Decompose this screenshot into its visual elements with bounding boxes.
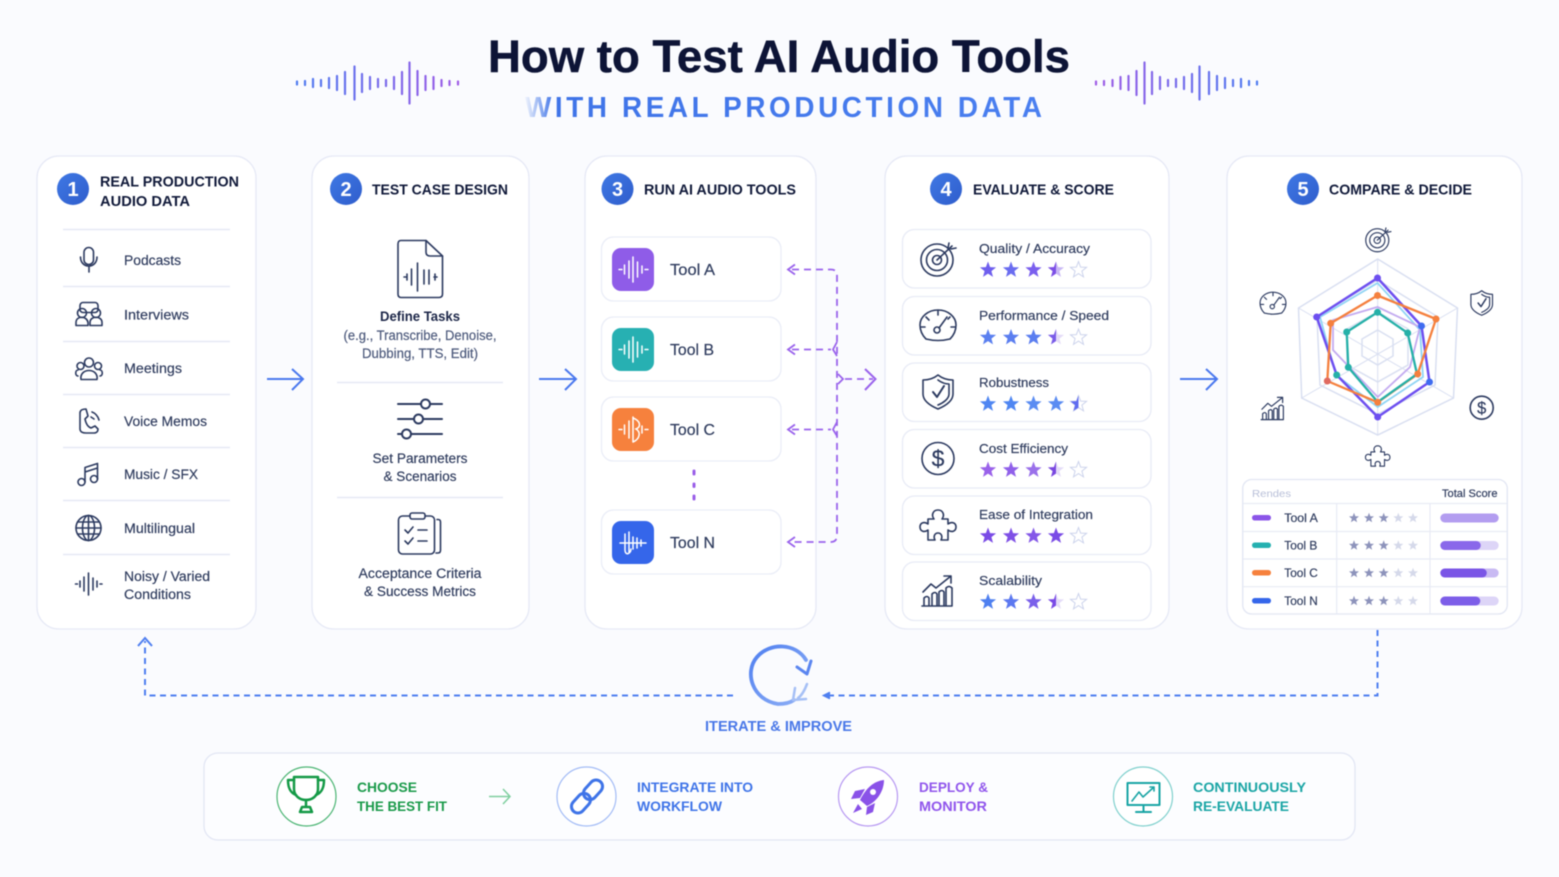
iterate feedback arrow: left xyxy=(138,638,733,696)
item: meetings xyxy=(76,358,182,380)
criterion: robustness xyxy=(902,363,1151,422)
iterate label: ITERATE & IMPROVE xyxy=(705,719,852,735)
acceptance criteria text: Acceptance Criteria xyxy=(358,566,482,581)
step number 1 xyxy=(57,173,89,205)
outcome: continuously re-evaluate: RE-EVALUATE xyxy=(1193,798,1289,814)
table header: Total Score xyxy=(1442,488,1498,500)
item: music: Music / SFX xyxy=(124,467,198,482)
item: multilingual: Multilingual xyxy=(124,521,195,536)
outcome: deploy and monitor xyxy=(838,767,988,826)
item: multilingual xyxy=(76,516,195,540)
set parameters text xyxy=(372,451,468,484)
arrow 1 to 2 xyxy=(267,369,303,390)
tool C: Tool C xyxy=(670,422,715,439)
panel: compare and decide xyxy=(1227,156,1522,629)
score table xyxy=(1243,480,1507,614)
step number 5 xyxy=(1287,173,1319,205)
radar icon: growth chart xyxy=(1261,397,1283,420)
criterion: cost efficiency: Cost Efficiency xyxy=(979,441,1069,456)
define tasks text: Dubbing, TTS, Edit) xyxy=(362,346,478,361)
step number 2 xyxy=(330,173,362,205)
table header: Rendes xyxy=(1252,488,1291,500)
row: tool N: Tool N xyxy=(1284,594,1318,608)
outcome: choose best fit xyxy=(277,767,447,826)
heading: RUN AI AUDIO TOOLS xyxy=(644,182,796,198)
criterion: scalability xyxy=(902,562,1151,620)
panel: test case design xyxy=(312,156,529,629)
radar icon: puzzle xyxy=(1365,446,1390,466)
icon: iterate loop xyxy=(751,646,811,704)
item: noisy xyxy=(76,569,210,602)
radar icon: dollar: $ xyxy=(1477,400,1486,418)
heading: EVALUATE & SCORE xyxy=(973,182,1114,198)
row: tool B: Tool B xyxy=(1284,538,1317,552)
step number 3 xyxy=(602,173,634,205)
criterion: performance xyxy=(902,296,1151,355)
outcome: integrate into workflow: INTEGRATE INTO xyxy=(637,779,753,795)
tool A xyxy=(602,237,781,301)
tool B: Tool B xyxy=(670,342,714,359)
panel: outcomes xyxy=(204,753,1355,840)
icon: clipboard xyxy=(398,513,440,554)
panel: run ai audio tools xyxy=(585,156,816,629)
criterion: quality: Quality / Accuracy xyxy=(979,241,1091,256)
set parameters text: & Scenarios xyxy=(384,469,457,484)
criterion: cost efficiency: $ xyxy=(932,446,945,472)
dashed connectors between tools and evaluation xyxy=(788,264,876,547)
title: How to Test AI Audio Tools xyxy=(488,31,1070,82)
acceptance criteria text: & Success Metrics xyxy=(364,584,476,599)
step number 5: 5 xyxy=(1297,179,1309,201)
tool C xyxy=(602,397,781,461)
heading: AUDIO DATA xyxy=(100,193,190,210)
tool N: Tool N xyxy=(670,535,715,552)
icon: audio document xyxy=(398,240,442,298)
tool B xyxy=(602,317,781,381)
heading: REAL PRODUCTION xyxy=(100,174,239,190)
row: tool B xyxy=(1252,538,1499,552)
item: voice memos xyxy=(80,409,207,433)
outcome: choose best fit: THE BEST FIT xyxy=(357,798,447,814)
acceptance criteria text xyxy=(358,566,482,599)
item: noisy: Noisy / Varied xyxy=(124,569,210,584)
criterion: robustness: Robustness xyxy=(979,375,1050,390)
radar icon: target xyxy=(1366,228,1391,252)
right waveform xyxy=(1096,62,1257,104)
step number 4: 4 xyxy=(940,179,952,201)
panel: evaluate and score xyxy=(885,156,1169,629)
table header xyxy=(1252,488,1498,500)
row: tool N xyxy=(1252,594,1499,608)
radar icon: gauge xyxy=(1260,292,1286,314)
tool A: Tool A xyxy=(670,262,715,279)
arrow 4 to 5 xyxy=(1180,369,1217,390)
item: interviews: Interviews xyxy=(124,308,189,322)
item: music xyxy=(78,464,198,486)
define tasks text xyxy=(344,309,496,361)
row: tool A xyxy=(1252,511,1499,525)
outcome: continuously re-evaluate: CONTINUOUSLY xyxy=(1193,779,1307,795)
left waveform xyxy=(297,62,458,104)
step number 4 xyxy=(930,173,962,205)
radar icon: shield xyxy=(1471,291,1492,315)
outcome: deploy and monitor: DEPLOY & xyxy=(919,779,988,795)
radar icon: dollar xyxy=(1470,396,1493,419)
outcome: choose best fit: CHOOSE xyxy=(357,779,417,795)
step number 3: 3 xyxy=(612,179,623,201)
item: podcasts xyxy=(80,248,181,272)
item: voice memos: Voice Memos xyxy=(124,414,207,429)
criterion: quality xyxy=(902,230,1151,288)
criterion: scalability: Scalability xyxy=(979,573,1043,588)
item: podcasts: Podcasts xyxy=(124,253,181,268)
tool N xyxy=(602,510,781,574)
define tasks text: Define Tasks xyxy=(380,309,460,324)
criterion: cost efficiency xyxy=(902,430,1151,488)
row: tool A: Tool A xyxy=(1284,511,1318,525)
green arrow xyxy=(489,789,510,804)
step number 1: 1 xyxy=(67,179,79,201)
heading xyxy=(100,174,239,210)
criterion: ease of integration xyxy=(902,496,1151,554)
criterion: ease of integration: Ease of Integration xyxy=(979,507,1093,522)
heading: TEST CASE DESIGN xyxy=(372,182,508,198)
outcome: integrate into workflow xyxy=(557,767,753,826)
row: tool C xyxy=(1252,566,1499,580)
subtitle: WITH REAL PRODUCTION DATA xyxy=(525,91,1042,124)
row: tool C: Tool C xyxy=(1284,566,1318,580)
item: interviews xyxy=(76,302,189,326)
heading: COMPARE & DECIDE xyxy=(1329,182,1472,198)
panel: real production audio data xyxy=(37,156,256,629)
criterion: performance: Performance / Speed xyxy=(979,308,1109,323)
outcome: continuously re-evaluate xyxy=(1114,767,1307,826)
outcome: integrate into workflow: WORKFLOW xyxy=(637,798,723,814)
continuation dots xyxy=(692,471,696,499)
iterate feedback arrow: right xyxy=(824,630,1378,698)
radar chart xyxy=(1298,259,1458,435)
define tasks text: (e.g., Transcribe, Denoise, xyxy=(344,328,496,343)
outcome: deploy and monitor: MONITOR xyxy=(919,798,987,814)
step number 2: 2 xyxy=(340,179,352,201)
arrow 2 to 3 xyxy=(539,369,576,390)
item: noisy: Conditions xyxy=(124,587,191,602)
item: meetings: Meetings xyxy=(124,361,182,376)
icon: sliders xyxy=(398,400,442,438)
set parameters text: Set Parameters xyxy=(372,451,468,466)
